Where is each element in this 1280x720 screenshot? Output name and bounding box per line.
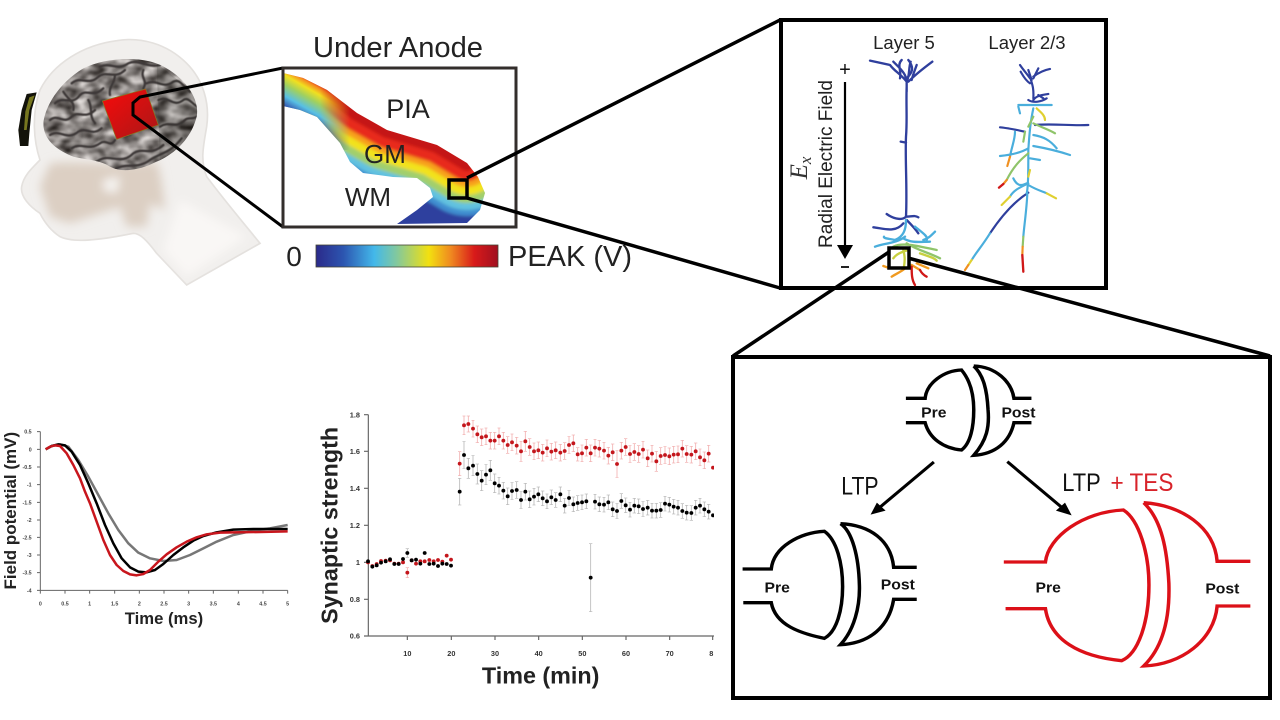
icon: translucent head	[21, 40, 260, 285]
icon: skull	[40, 162, 247, 277]
synapse: after LTP: Post	[881, 577, 915, 593]
colour scale: PEAK (V)	[508, 241, 632, 273]
y tick labels: 1.6	[350, 447, 360, 456]
map frame	[283, 68, 516, 227]
y tick labels: -1.5	[22, 500, 32, 506]
x tick labels: 2	[138, 601, 141, 607]
x tick labels: 1.5	[111, 601, 118, 607]
x tick labels: 2.5	[160, 601, 168, 607]
x tick labels: 0.5	[61, 601, 69, 607]
neuron: layer 2/3	[965, 65, 1088, 272]
callout lines from field map to neuron panel	[467, 20, 780, 288]
x axis title: Time (min)	[482, 662, 599, 688]
head model with brain	[18, 40, 260, 285]
colour scale: 0	[286, 241, 302, 272]
chart: field potential waveforms	[1, 430, 289, 628]
arrow: radial field direction	[837, 59, 853, 268]
x tick labels: 10	[403, 649, 411, 658]
y tick labels: -3	[27, 553, 32, 559]
label: Radial Electric Field: Radial Electric Field	[816, 80, 837, 248]
label: WM: WM	[345, 182, 391, 212]
waveform: red	[46, 445, 288, 575]
y tick labels: -1	[27, 483, 32, 489]
data points: red	[368, 424, 713, 573]
data series and error bars	[368, 416, 713, 612]
callout lines from neuron to synapse panel	[733, 252, 1270, 356]
synapse: after LTP plus TES: Pre	[1036, 580, 1061, 597]
x tick labels: 0	[39, 601, 42, 607]
y tick labels	[350, 410, 361, 641]
arrow: to LTP plus TES	[1007, 462, 1072, 515]
axes and ticks	[37, 432, 288, 594]
x tick labels: 5	[286, 601, 289, 607]
label: Ex: E	[786, 164, 813, 179]
y tick labels: -3.5	[22, 571, 32, 577]
data points: black	[368, 455, 713, 578]
icon: brain	[43, 59, 198, 170]
panel: neurons in radial electric field	[781, 20, 1106, 288]
y tick labels: -0.5	[22, 465, 32, 471]
arrow: radial field direction: +	[839, 59, 851, 81]
synapse: baseline	[906, 366, 1036, 455]
label: LTP: LTP	[841, 473, 879, 500]
x tick labels: 70	[666, 649, 674, 658]
x tick labels: 20	[447, 649, 455, 658]
x tick labels: 8	[709, 649, 713, 658]
panel: under anode field map	[280, 32, 632, 273]
y tick labels: 1	[356, 558, 360, 567]
y tick labels: 0	[29, 447, 32, 453]
label: Layer 5: Layer 5	[873, 32, 935, 53]
y tick labels: 1.2	[350, 521, 360, 530]
synapse: baseline: Post	[1001, 405, 1036, 422]
synapse: after LTP: Pre	[765, 580, 790, 597]
x tick labels: 4.5	[259, 601, 267, 607]
y tick labels: 1.4	[350, 484, 361, 493]
synapse: after LTP plus TES: Post	[1205, 581, 1239, 597]
y tick labels: 0.8	[350, 595, 360, 604]
x tick labels: 3.5	[210, 601, 217, 607]
highlight square on basal dendrites	[889, 248, 909, 268]
error bars: red	[407, 416, 709, 578]
y tick labels: 0.6	[350, 632, 360, 641]
x tick labels	[39, 601, 289, 607]
highlight square on cortex	[449, 180, 467, 198]
label: Layer 2/3: Layer 2/3	[988, 32, 1066, 53]
label: PIA: PIA	[386, 94, 430, 124]
label: Ex: x	[796, 156, 815, 165]
colour scale	[286, 241, 632, 273]
x axis title: Time (ms)	[125, 609, 203, 628]
callout lines from brain to field map	[133, 68, 283, 227]
synapse: baseline: Pre	[921, 405, 947, 422]
label: LTP + TES: LTP	[1062, 470, 1101, 497]
arrow: to LTP	[871, 462, 934, 515]
label: LTP + TES: + TES	[1110, 470, 1173, 497]
cortex colour band	[284, 73, 485, 224]
label: LTP + TES	[1062, 470, 1173, 497]
error bars: black	[407, 442, 709, 612]
synapse: after LTP plus TES	[1004, 503, 1250, 666]
x tick labels: 30	[491, 649, 499, 658]
x tick labels: 1	[88, 601, 91, 607]
y axis title: Field potential (mV)	[1, 432, 20, 589]
x tick labels: 60	[622, 649, 630, 658]
icon: anode region on brain	[102, 89, 158, 139]
y tick labels: -2	[27, 518, 32, 524]
y axis title: Synaptic strength	[316, 427, 342, 624]
x tick labels: 4	[237, 601, 240, 607]
icon: cathode electrode	[18, 92, 37, 146]
chart: synaptic strength over time	[316, 410, 714, 688]
x tick labels: 50	[578, 649, 586, 658]
waveform: grey	[46, 444, 288, 561]
y tick labels: 0.5	[24, 430, 32, 436]
waveform: black	[46, 444, 288, 572]
y tick labels: -4	[27, 588, 32, 594]
y tick labels: -2.5	[22, 535, 32, 541]
heading: Under Anode: Under Anode	[313, 32, 483, 64]
axes and ticks	[364, 415, 714, 640]
x tick labels: 40	[535, 649, 543, 658]
label: GM: GM	[364, 139, 406, 169]
x tick labels: 3	[187, 601, 190, 607]
y tick labels	[22, 430, 32, 594]
synapse: after LTP	[743, 524, 917, 645]
x tick labels	[403, 649, 713, 658]
panel: synapse diagrams	[733, 357, 1270, 698]
neuron: layer 5	[870, 60, 940, 285]
y tick labels: 1.8	[350, 410, 360, 419]
